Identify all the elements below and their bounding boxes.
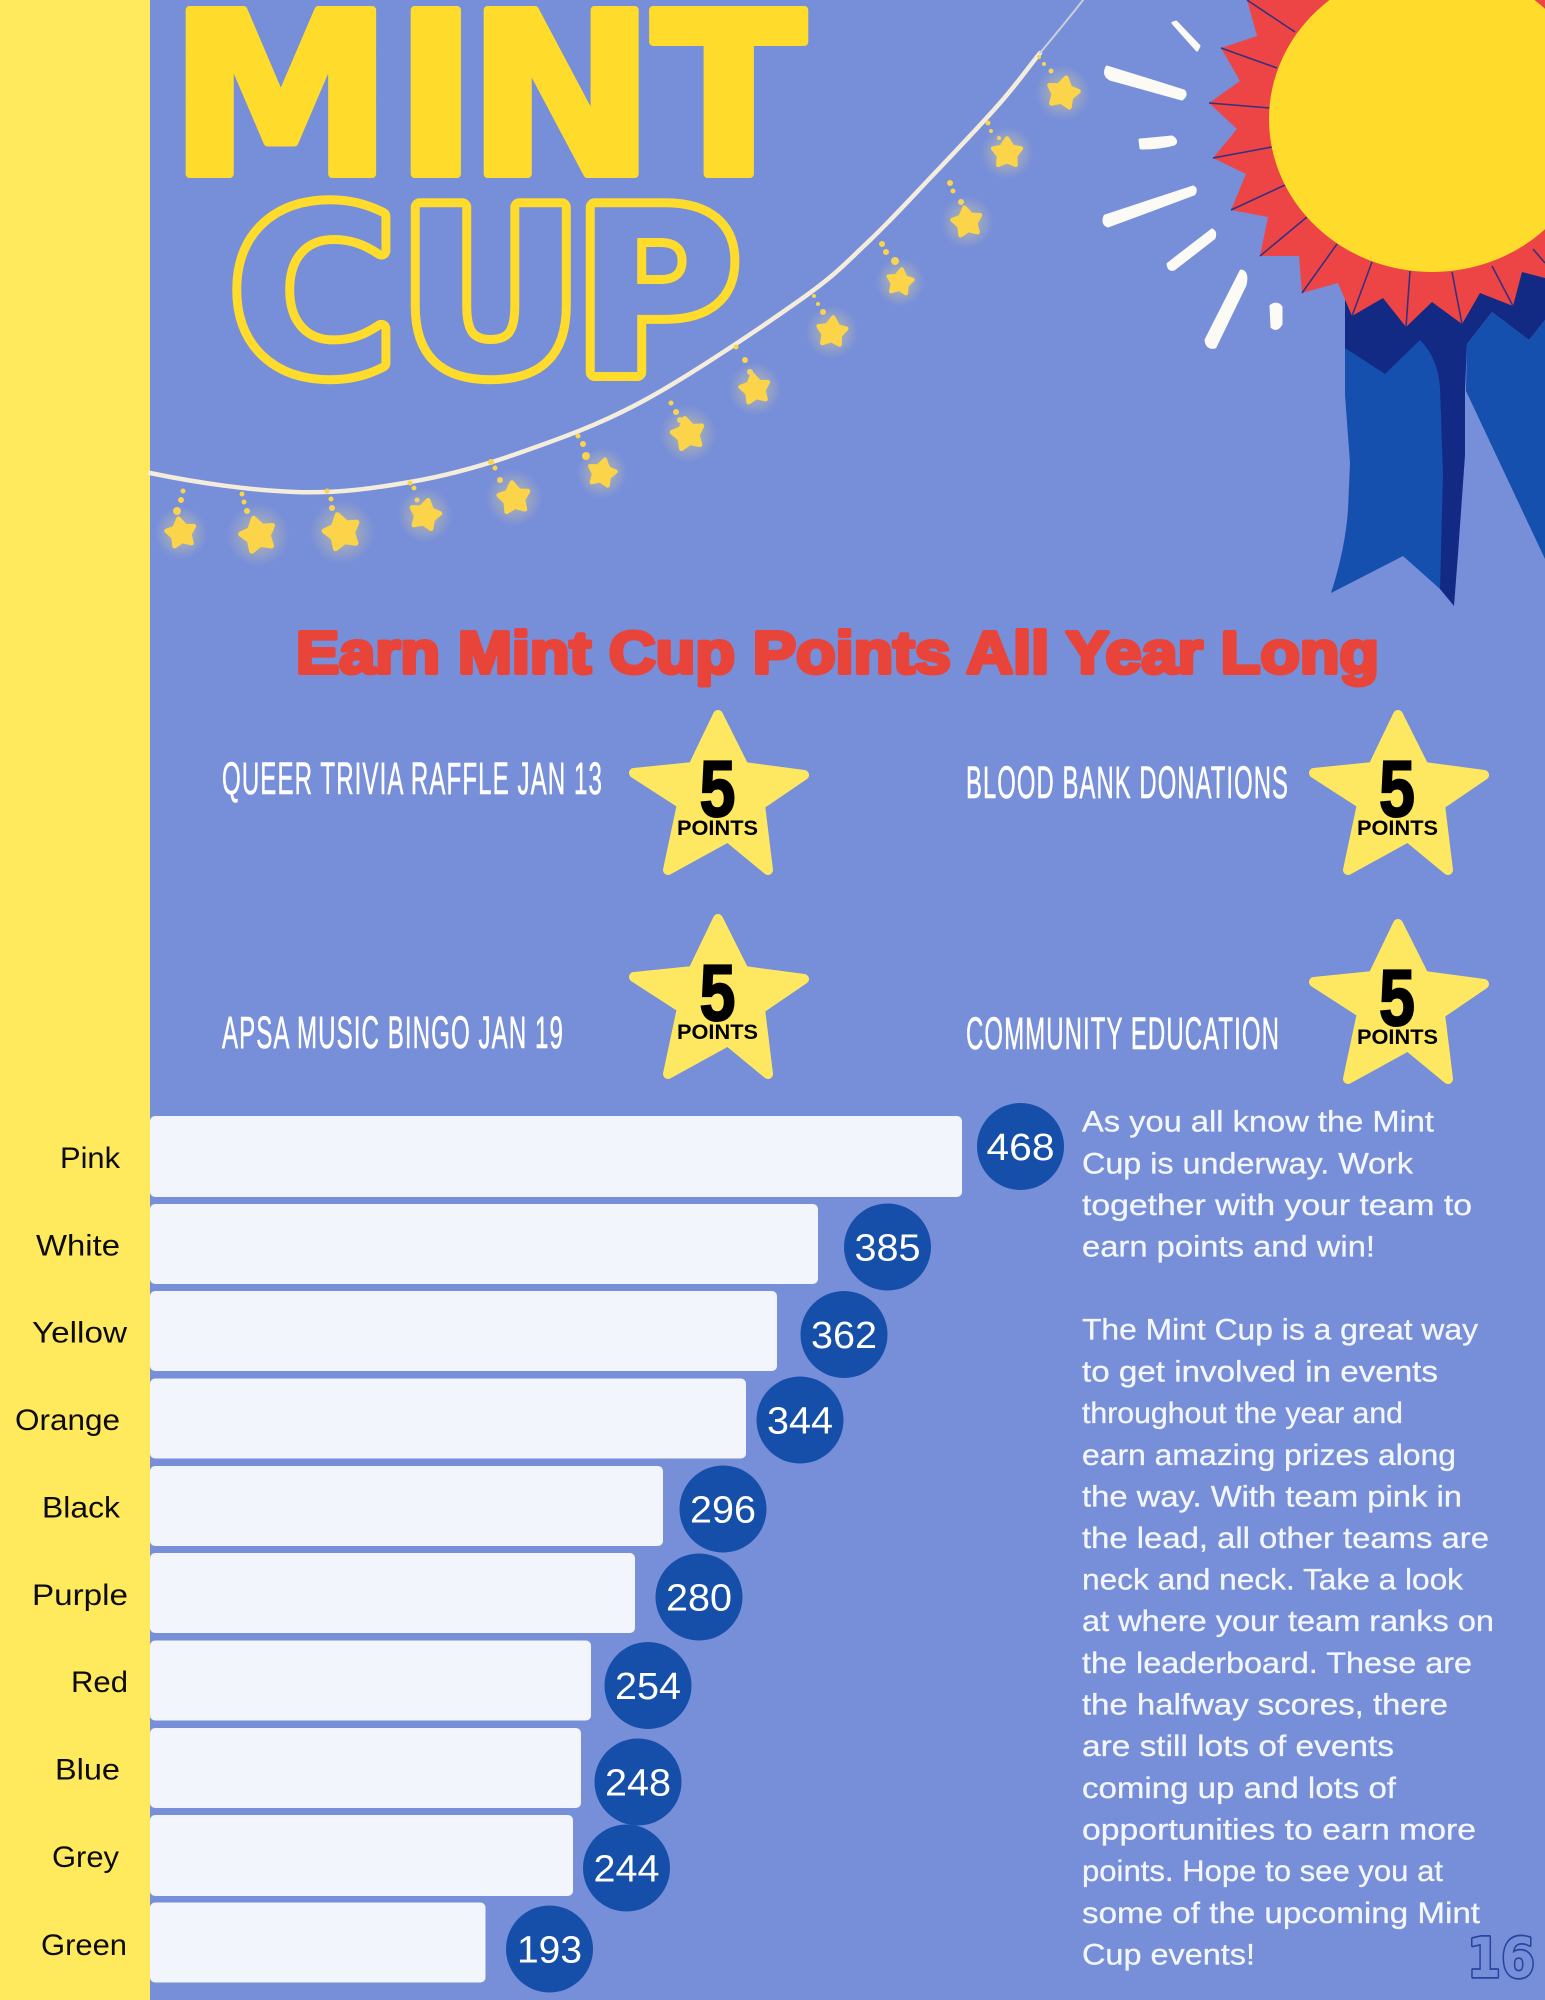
- icon: hanging star 5: [485, 459, 543, 527]
- event: Community Education: COMMUNITY EDUCATION: [966, 1008, 1280, 1059]
- text block: explanation: As you all know the Mint: [1082, 1106, 1435, 1139]
- row: Grey 244: [52, 1815, 670, 1912]
- row: White 385: White: [36, 1230, 120, 1262]
- text block: explanation: the leaderboard. These are: [1082, 1647, 1472, 1680]
- text block: explanation: Cup events!: [1082, 1938, 1255, 1971]
- row: Green 193: 193: [517, 1930, 582, 1972]
- text block: explanation: some of the upcoming Mint: [1082, 1897, 1481, 1930]
- badge: 5 points star: 5: [1379, 953, 1415, 1042]
- row: Blue 248: Blue: [55, 1754, 120, 1786]
- heading: Earn Mint Cup Points All Year Long: [296, 620, 1379, 686]
- row: Yellow 362: Yellow: [32, 1316, 127, 1350]
- text block: explanation: the halfway scores, there: [1082, 1689, 1448, 1722]
- title: CUP outlined: CUP: [230, 163, 740, 426]
- icon: hanging star 1: [154, 488, 208, 560]
- row: Red 254: Red: [71, 1666, 128, 1699]
- text block: explanation: earn points and win!: [1082, 1230, 1375, 1264]
- text block: explanation: at where your team ranks on: [1082, 1605, 1494, 1638]
- row: Green 193: Green: [41, 1929, 127, 1962]
- row: Pink 468: Pink: [60, 1142, 121, 1175]
- text block: explanation: Cup is underway. Work: [1082, 1147, 1414, 1180]
- text block: explanation: neck and neck. Take a look: [1082, 1564, 1464, 1597]
- row: Green 193: [41, 1902, 593, 1992]
- row: Purple 280: [32, 1553, 742, 1640]
- badge: 5 points star: POINTS: [1357, 817, 1438, 840]
- icon: hanging star 12: [980, 120, 1034, 180]
- row: Purple 280: 280: [666, 1578, 732, 1620]
- row: Red 254: [71, 1640, 692, 1729]
- row: Black 296: [42, 1466, 766, 1552]
- medal centre: [1269, 0, 1545, 272]
- event: Queer Trivia Raffle: QUEER TRIVIA RAFFLE JAN 13: [222, 753, 603, 804]
- text block: explanation: opportunities to earn more: [1082, 1813, 1476, 1846]
- text block: explanation: [1082, 1106, 1494, 1971]
- row: Orange 344: 344: [767, 1400, 833, 1442]
- icon: hanging star 9: [805, 294, 859, 359]
- icon: award ribbon medal: [1209, 0, 1545, 606]
- badge: 5 points star: [1314, 715, 1484, 870]
- badge: 5 points star: POINTS: [677, 817, 758, 840]
- row: Blue 248: [55, 1728, 682, 1826]
- icon: hanging star 11: [940, 180, 994, 249]
- row: Red 254: 254: [615, 1666, 681, 1708]
- row: Grey 244: Grey: [52, 1841, 119, 1874]
- icon: hanging star 4: [397, 480, 453, 543]
- row: Blue 248: 248: [605, 1762, 671, 1804]
- row: Orange 344: [15, 1376, 844, 1464]
- row: Pink 468: [60, 1103, 1064, 1197]
- icon: hanging star 3: [309, 488, 375, 565]
- left ribbon tail: [1331, 340, 1443, 593]
- badge: 5 points star: 5: [1379, 744, 1415, 833]
- page number: 16: [1467, 1926, 1535, 1990]
- text block: explanation: earn amazing prizes along: [1082, 1439, 1456, 1472]
- text block: explanation: The Mint Cup is a great way: [1082, 1314, 1478, 1347]
- bar chart: team leaderboard: [15, 1103, 1064, 1992]
- badge: 5 points star: 5: [700, 744, 736, 833]
- event: APSA Music Bingo: APSA MUSIC BINGO JAN 19: [222, 1007, 564, 1058]
- row: Yellow 362: 362: [811, 1315, 877, 1357]
- badge: 5 points star: [634, 715, 804, 870]
- ribbon shadow: [1345, 270, 1545, 606]
- text block: explanation: the lead, all other teams are: [1082, 1522, 1489, 1555]
- icon: hanging star 7: [659, 400, 717, 463]
- icon: hanging star 6: [576, 434, 628, 499]
- icon: hanging star 8: [728, 344, 782, 416]
- text block: explanation: are still lots of events: [1082, 1730, 1394, 1763]
- text block: explanation: throughout the year and: [1082, 1397, 1403, 1430]
- yellow sidebar: [0, 0, 150, 2000]
- row: Black 296: 296: [690, 1490, 756, 1532]
- row: Grey 244: 244: [594, 1848, 660, 1890]
- badge: 5 points star: POINTS: [677, 1021, 758, 1044]
- icon: hanging star 13: [1035, 55, 1091, 121]
- rosette pleat lines: [1209, 0, 1545, 327]
- right ribbon tail: [1466, 312, 1545, 559]
- badge: 5 points star: POINTS: [1357, 1026, 1438, 1049]
- text block: explanation: together with your team to: [1082, 1189, 1472, 1222]
- badge: 5 points star: [634, 919, 804, 1074]
- row: White 385: 385: [854, 1228, 920, 1270]
- row: Orange 344: Orange: [15, 1404, 120, 1437]
- icon: hanging star 10: [875, 241, 925, 307]
- icon: white burst rays: [1104, 22, 1281, 347]
- string of lights: [150, 0, 1083, 492]
- red rosette: [1209, 0, 1545, 327]
- badge: 5 points star: [1314, 924, 1484, 1079]
- icon: hanging star 2: [226, 492, 290, 567]
- row: Purple 280: Purple: [32, 1579, 128, 1612]
- text block: explanation: coming up and lots of: [1082, 1772, 1397, 1805]
- row: Pink 468: 468: [986, 1127, 1054, 1169]
- text block: explanation: points. Hope to see you at: [1082, 1855, 1444, 1888]
- text block: explanation: the way. With team pink in: [1082, 1480, 1462, 1513]
- text block: explanation: to get involved in events: [1082, 1355, 1438, 1388]
- row: Yellow 362: [32, 1291, 888, 1378]
- row: Black 296: Black: [42, 1492, 121, 1524]
- row: White 385: [36, 1204, 931, 1290]
- badge: 5 points star: 5: [700, 948, 736, 1037]
